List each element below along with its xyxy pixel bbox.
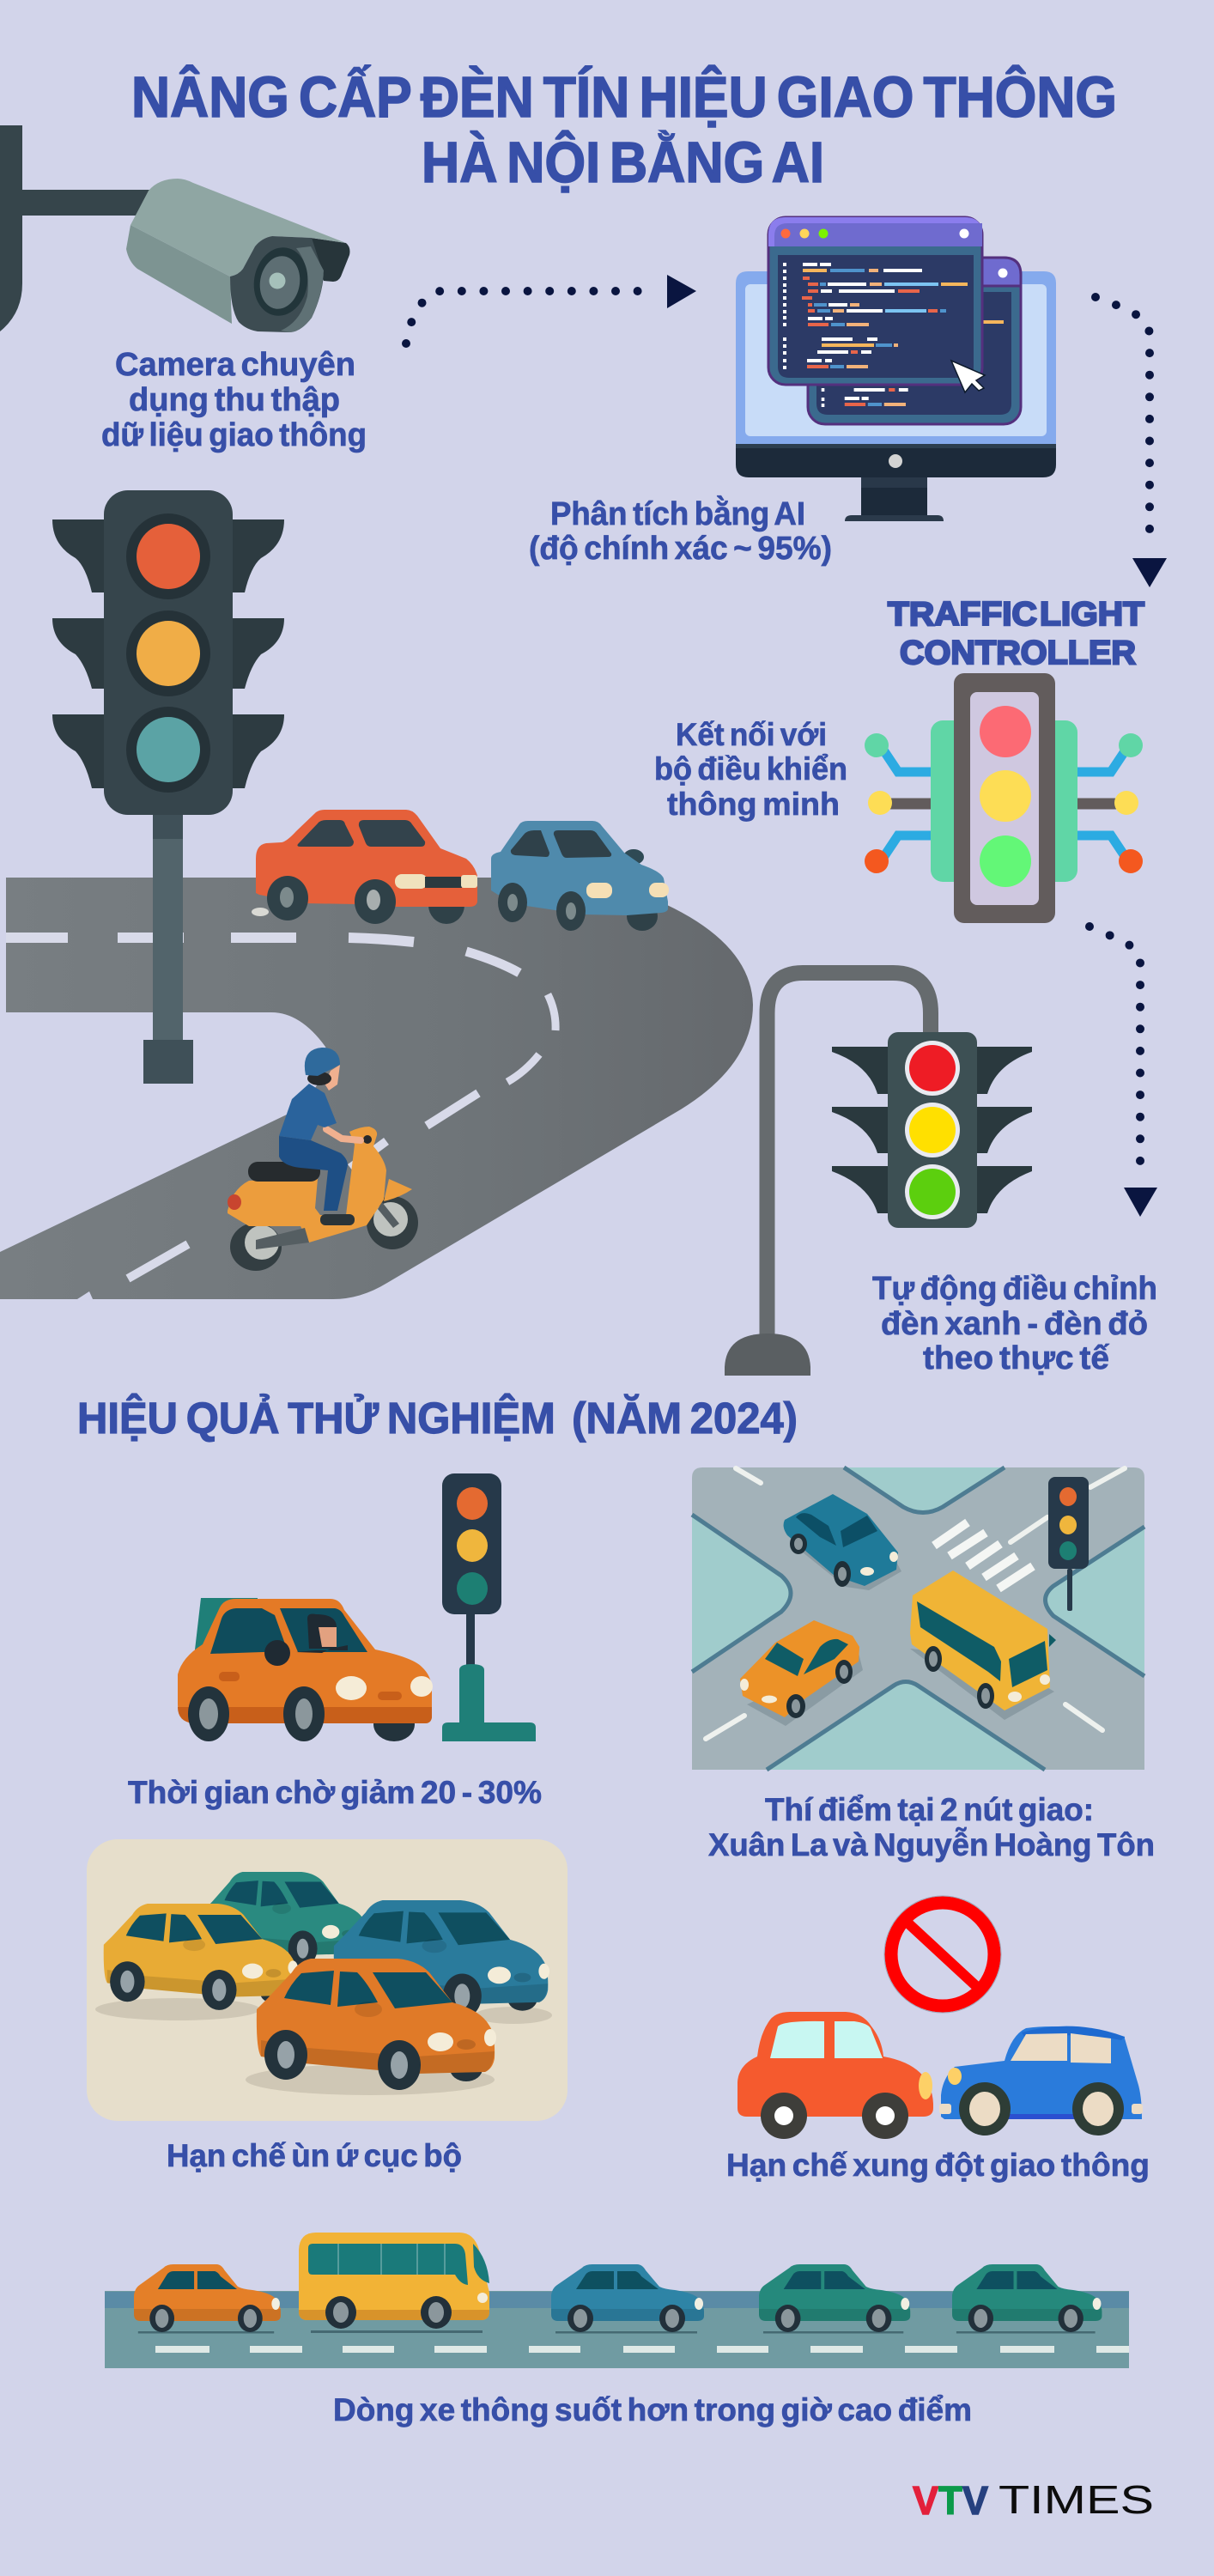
pole base — [143, 1040, 193, 1084]
caption: connect to controller: bộ điều khiển — [654, 751, 847, 787]
rider — [279, 1136, 348, 1211]
orange car — [740, 1620, 859, 1717]
blue car — [941, 2026, 1142, 2119]
caption: AI analysis — [529, 495, 832, 567]
heading: traffic light controller — [888, 596, 1144, 671]
icon: traffic light controller — [865, 673, 1143, 923]
monitor bezel — [736, 444, 1056, 477]
illustration: two cars conflict — [738, 2012, 1143, 2139]
heading: traffic light controller: TRAFFIC LIGHT — [888, 596, 1144, 633]
road base — [692, 1467, 1144, 1770]
logo: VTV Times: TIMES — [999, 2477, 1154, 2522]
monitor screen — [736, 271, 1056, 445]
crosswalk — [934, 1522, 1033, 1589]
mouse cursor — [951, 361, 985, 392]
lamps — [126, 513, 210, 599]
camera body upper — [131, 179, 346, 276]
monitor stand — [861, 477, 927, 515]
code lines — [783, 263, 968, 369]
teal car — [952, 2264, 1102, 2334]
caption: pilot intersections: Thí điểm tại 2 nút giao: — [765, 1792, 1094, 1827]
camera hood underside — [311, 238, 350, 282]
title: NÂNG CẤP ĐÈN TÍN HIỆU GIAO THÔNG — [131, 65, 1117, 130]
icon: computer monitor with code windows — [736, 217, 1056, 521]
connectors — [883, 749, 1126, 859]
side panel — [931, 720, 1077, 882]
orange car — [257, 1959, 496, 2090]
front window — [768, 217, 982, 385]
logo: VTV Times: VTV — [913, 2478, 988, 2523]
caption: traffic flow: Dòng xe thông suốt hơn trong giờ cao điểm — [333, 2392, 972, 2427]
section heading: pilot results: HIỆU QUẢ THỬ NGHIỆM (NĂM 2024) — [77, 1393, 798, 1443]
ground shadows — [95, 1998, 260, 2020]
icon: no entry sign — [884, 1896, 1001, 2013]
caption: camera: dụng thu thập — [129, 382, 340, 418]
teal car — [759, 2264, 910, 2334]
icon: overhead traffic light on arched pole — [725, 973, 1032, 1376]
icon: large traffic light — [52, 490, 284, 1084]
visors — [832, 1047, 1032, 1213]
title — [131, 65, 1117, 195]
lane markings — [6, 938, 555, 1279]
illustration: intersection — [692, 1467, 1144, 1770]
window controls — [781, 228, 790, 239]
caption: AI analysis: Phân tích bằng AI — [550, 495, 805, 532]
blue car — [551, 2264, 704, 2334]
panel background — [87, 1839, 568, 2121]
scooter body — [228, 1127, 386, 1242]
caption: pilot intersections — [708, 1792, 1155, 1862]
caption: conflict: Hạn chế xung đột giao thông — [726, 2148, 1150, 2183]
illustration: orange car on road — [252, 810, 477, 924]
caption: auto adjust lights — [872, 1271, 1157, 1376]
scooter wheels — [230, 1223, 282, 1271]
camera body lower — [126, 225, 232, 324]
scooter seat — [248, 1162, 320, 1182]
housing — [954, 673, 1055, 923]
lamps — [905, 1041, 960, 1096]
illustration: scooter rider — [228, 1048, 418, 1271]
blue car — [334, 1900, 549, 2019]
heading: traffic light controller: CONTROLLER — [900, 635, 1136, 671]
side visors — [52, 519, 284, 788]
caption: auto adjust lights: theo thực tế — [923, 1340, 1110, 1376]
blue car — [784, 1494, 898, 1586]
caption: auto adjust lights: Tự động điều chỉnh — [872, 1271, 1157, 1307]
corner islands — [692, 1467, 1144, 1770]
vehicle shadows — [747, 1546, 1054, 1726]
camera lens housing — [230, 236, 324, 332]
caption: connect to controller — [654, 717, 847, 822]
camera lens — [249, 243, 313, 320]
driver — [307, 1614, 337, 1649]
road strip — [105, 2291, 1129, 2368]
caption: camera — [101, 347, 367, 453]
car — [194, 1598, 258, 1657]
mini traffic light — [1067, 1569, 1072, 1611]
bus — [1049, 1634, 1056, 1647]
caption: auto adjust lights: đèn xanh - đèn đỏ — [881, 1306, 1148, 1342]
housing — [104, 490, 233, 815]
traffic light head — [442, 1473, 501, 1614]
illustration: traffic flow road — [105, 2233, 1129, 2368]
caption: camera: dữ liệu giao thông — [101, 417, 367, 453]
arrow: AI to controller — [1096, 297, 1167, 587]
logo: VTV Times — [913, 2477, 1154, 2523]
arrow: camera to AI — [406, 275, 696, 343]
illustration: car waiting at traffic light — [178, 1473, 536, 1741]
caption: AI analysis: (độ chính xác ~ 95%) — [529, 531, 832, 567]
road surface — [0, 878, 753, 1299]
pole — [153, 815, 183, 1040]
arrow: controller to traffic light — [1090, 927, 1157, 1217]
lane markings — [706, 1468, 1125, 1739]
traffic light pole — [466, 1614, 475, 1666]
camera mount — [0, 125, 156, 331]
pole base — [725, 1334, 810, 1376]
caption: connect to controller: thông minh — [667, 787, 840, 822]
caption: connect to controller: Kết nối với — [676, 717, 827, 752]
title: HÀ NỘI BẰNG AI — [422, 131, 824, 195]
orange car — [134, 2264, 281, 2334]
housing — [888, 1032, 977, 1228]
back window — [808, 258, 1021, 424]
lamps — [980, 706, 1031, 757]
pole — [768, 973, 931, 1336]
lane dashes — [155, 2346, 1129, 2353]
caption: pilot intersections: Xuân La và Nguyễn Hoàng Tôn — [708, 1827, 1155, 1862]
bus — [299, 2233, 489, 2333]
caption: waiting time: Thời gian chờ giảm 20 - 30% — [128, 1775, 542, 1810]
caption: congestion: Hạn chế ùn ứ cục bộ — [167, 2138, 462, 2173]
teal car — [206, 1872, 368, 1966]
illustration: blue car on road — [491, 821, 669, 931]
yellow car — [104, 1904, 298, 2010]
icon: security camera — [0, 125, 350, 332]
illustration: curved road — [0, 878, 753, 1299]
caption: camera: Camera chuyên — [115, 347, 355, 383]
panel: traffic congestion — [87, 1839, 568, 2121]
red car — [738, 2012, 933, 2117]
